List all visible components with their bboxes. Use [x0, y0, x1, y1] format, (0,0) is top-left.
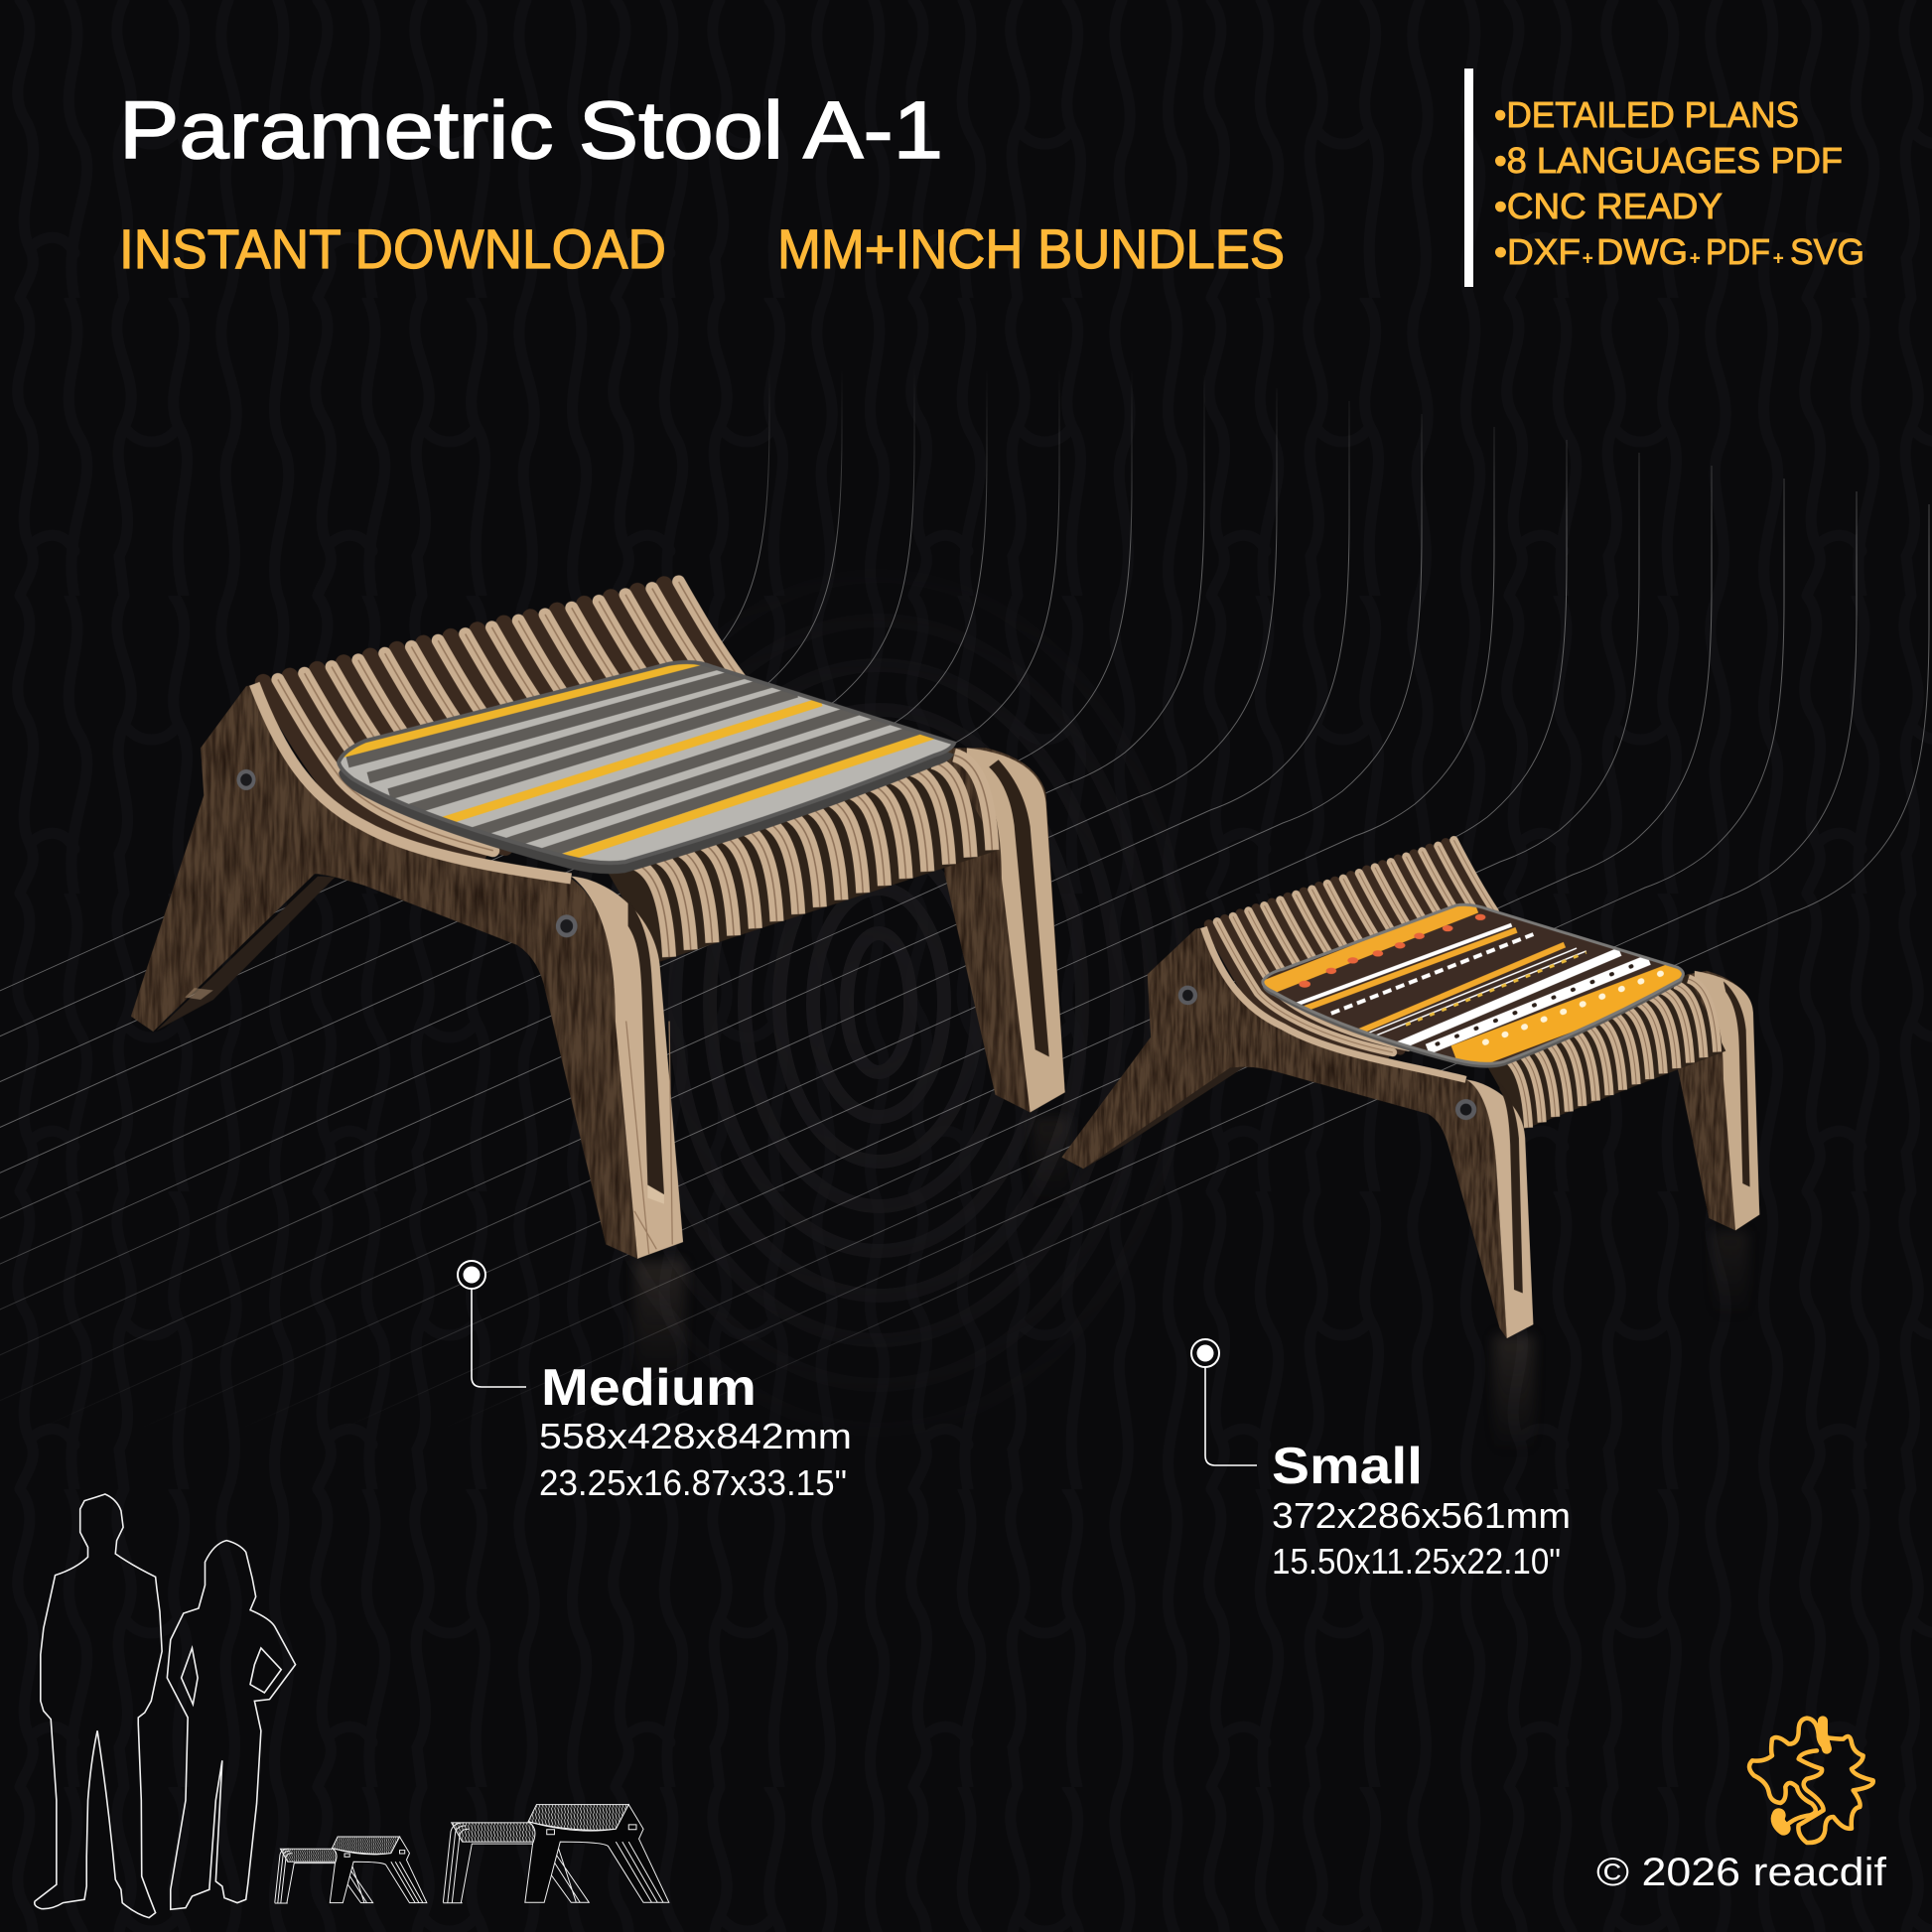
subtitle: instant download: INSTANT DOWNLOAD — [119, 217, 666, 280]
bolts — [1178, 986, 1476, 1120]
reacdif logo — [1749, 1719, 1873, 1843]
backrest slats — [263, 582, 742, 854]
front seat slats — [1480, 974, 1725, 1130]
title: Parametric Stool A-1 — [119, 85, 943, 176]
metric size: 558x428x842mm — [539, 1416, 852, 1456]
plywood edge — [1203, 927, 1533, 1338]
features list: •DXF — [1494, 231, 1581, 272]
features list — [1494, 94, 1864, 272]
features list: SVG — [1790, 231, 1864, 272]
callout: small — [1191, 1339, 1571, 1582]
woman silhouette — [167, 1541, 296, 1909]
medium stool — [131, 582, 1065, 1259]
bolts — [236, 769, 578, 937]
back right leg — [1678, 971, 1759, 1230]
features list: + — [1690, 248, 1701, 268]
marker — [1191, 1339, 1219, 1367]
copyright: © 2026 reacdif — [1596, 1851, 1887, 1894]
plywood edge — [185, 684, 683, 1259]
label medium: Medium — [541, 1359, 757, 1417]
back right leg — [941, 748, 1065, 1112]
metric size: 372x286x561mm — [1272, 1495, 1571, 1536]
leader line — [1205, 1367, 1257, 1465]
divider bar — [1464, 69, 1473, 287]
backrest slats — [1209, 840, 1497, 1055]
features list: •CNC READY — [1494, 186, 1723, 226]
scale comparison figures — [35, 1494, 669, 1918]
features list: •DETAILED PLANS — [1494, 94, 1799, 135]
features list: + — [1773, 248, 1784, 268]
inch size: 23.25x16.87x33.15" — [539, 1462, 847, 1503]
patterned cushion — [1254, 897, 1692, 1068]
label small: Small — [1272, 1438, 1423, 1495]
floor and wall contour lines — [0, 387, 1930, 1401]
features list: DWG — [1596, 231, 1688, 272]
mini stool medium — [443, 1805, 669, 1903]
inch size: 15.50x11.25x22.10" — [1272, 1541, 1561, 1582]
features list: + — [1583, 248, 1593, 268]
side panel — [1061, 927, 1507, 1338]
callout: medium — [458, 1261, 852, 1503]
subtitle: bundles: MM+INCH BUNDLES — [777, 217, 1285, 280]
side panel — [131, 684, 637, 1259]
marker — [458, 1261, 485, 1289]
inner rear leg — [1083, 1067, 1245, 1169]
man silhouette — [35, 1494, 162, 1918]
background concentric pattern — [612, 715, 1150, 1291]
leader line — [472, 1289, 526, 1387]
small stool — [1061, 840, 1759, 1338]
mini stool small — [275, 1837, 427, 1903]
front seat slats — [606, 756, 999, 962]
features list: PDF — [1706, 231, 1770, 272]
features list: •8 LANGUAGES PDF — [1494, 140, 1843, 181]
floor reflections — [635, 1117, 1748, 1454]
striped cushion — [328, 655, 967, 874]
inner rear leg — [156, 877, 335, 1031]
